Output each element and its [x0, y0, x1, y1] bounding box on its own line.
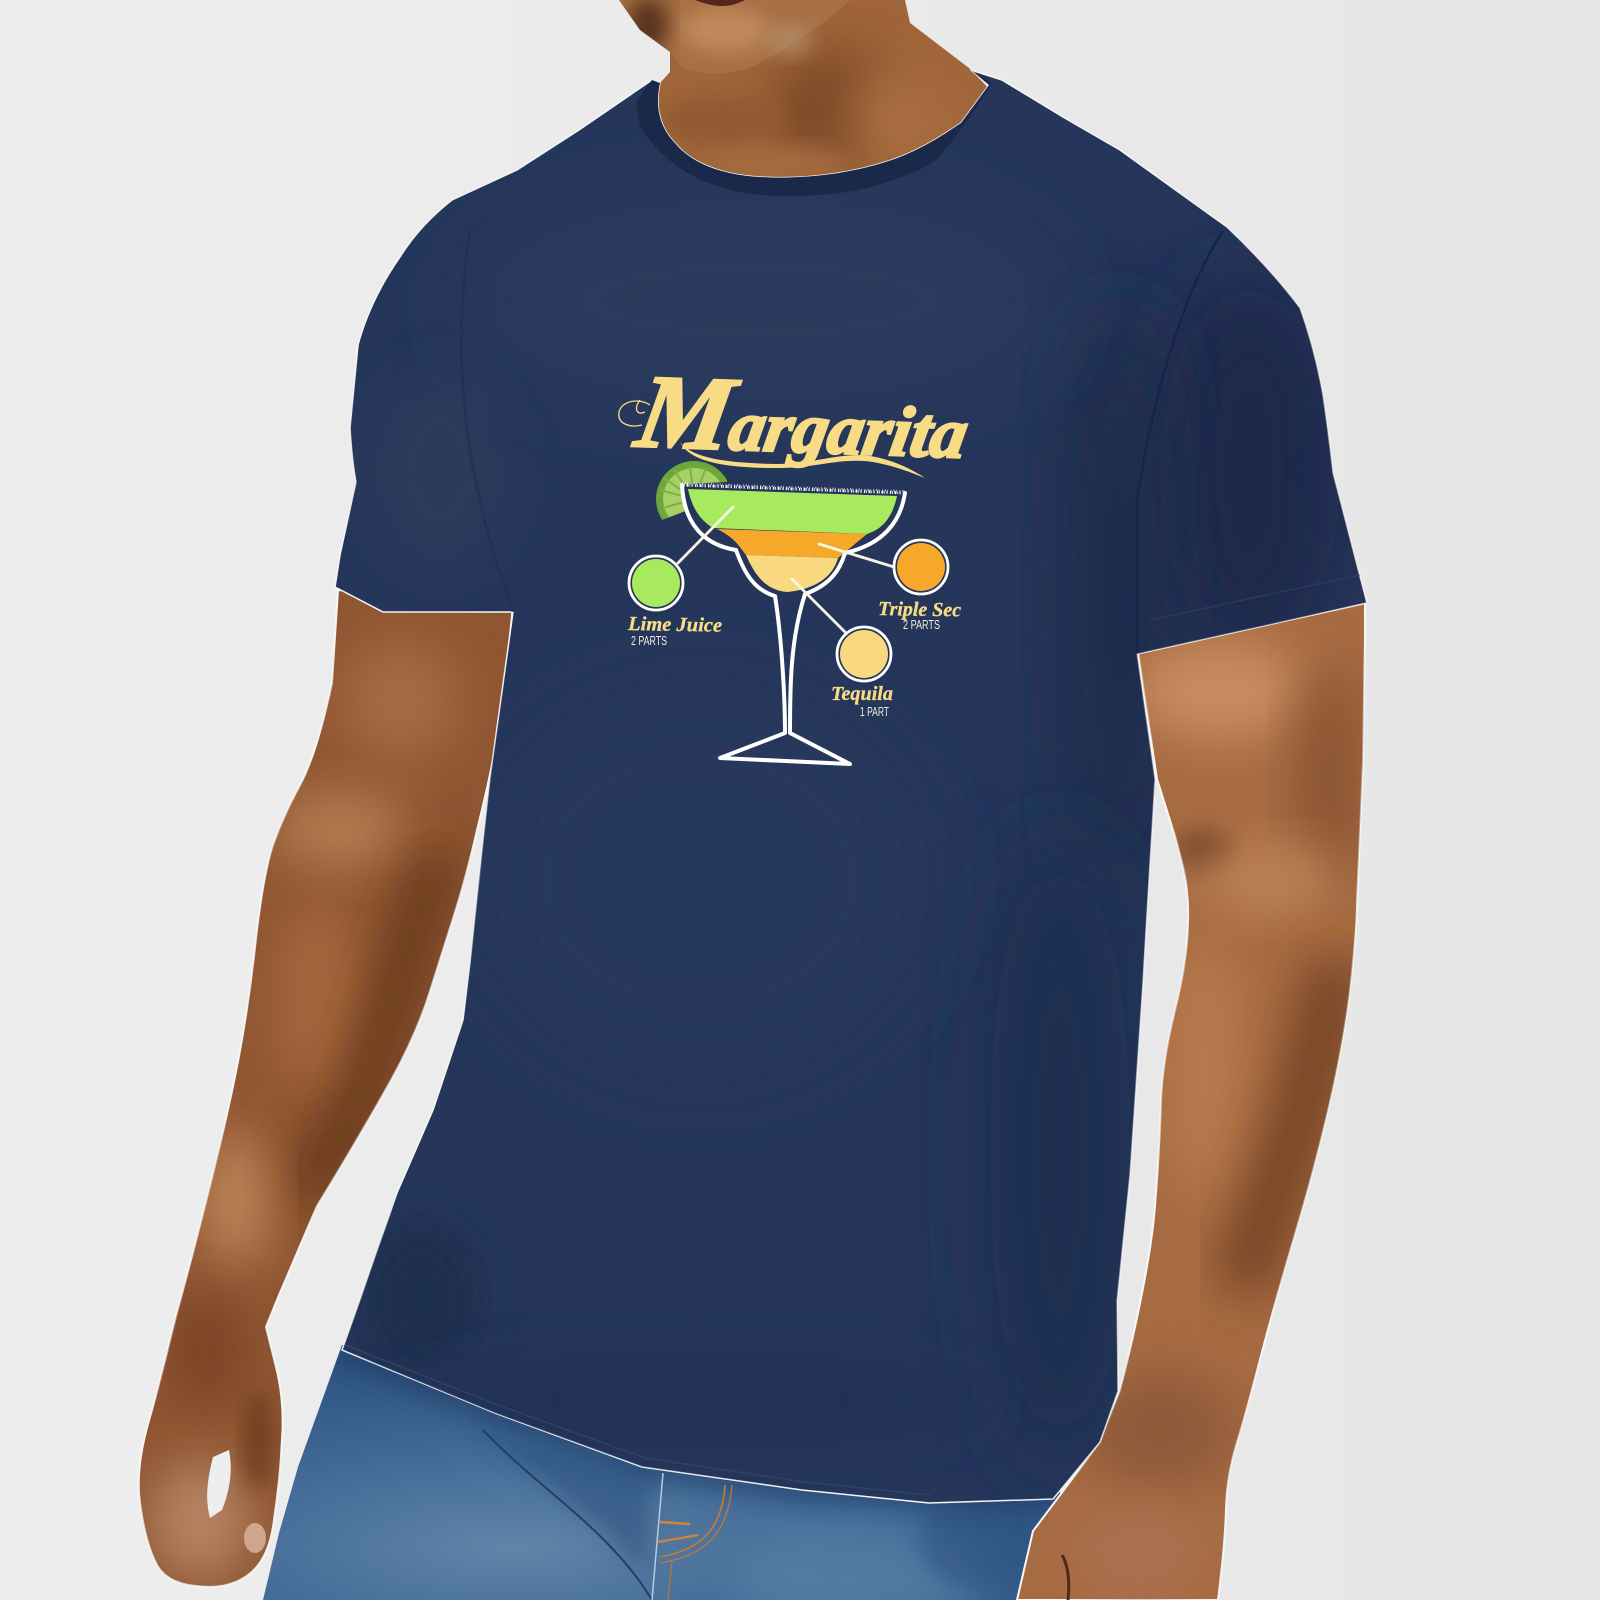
triple sec ingredient: 2 PARTS: [903, 618, 940, 632]
fingernail: [244, 1523, 266, 1553]
lime juice ingredient: Lime Juice: [627, 613, 722, 637]
lime juice ingredient: 2 PARTS: [631, 634, 667, 648]
chin: [619, 0, 850, 74]
title swash loop: [619, 400, 650, 426]
tequila ingredient: Tequila: [831, 683, 893, 705]
callout lines: [678, 507, 894, 632]
glass outline: [682, 485, 905, 764]
lime juice layer: [688, 489, 897, 534]
collar: [637, 70, 992, 196]
title flourish: [680, 442, 925, 478]
navy t-shirt: [335, 70, 1367, 1503]
jeans pocket seam and fly: [483, 1430, 732, 1600]
lime juice ingredient: [627, 556, 722, 648]
salt rim: [682, 483, 905, 493]
cocktail graphic: [619, 353, 979, 764]
triple sec ingredient: Triple Sec: [878, 598, 961, 621]
tequila layer: [746, 555, 838, 592]
neck and chin: [619, 0, 987, 177]
tequila ingredient: 1 PART: [860, 705, 889, 719]
right arm and hand: [1017, 600, 1365, 1600]
title: Margarita: [627, 353, 979, 480]
lower lip shadow: [695, 0, 745, 6]
triple sec layer: [717, 529, 867, 558]
lime wedge garnish: [656, 461, 728, 520]
tequila ingredient: [831, 627, 893, 719]
gap between thumb and fingers: [207, 1450, 231, 1518]
liquid layers: [688, 489, 897, 592]
left arm and hand: [139, 590, 513, 1587]
triple sec ingredient: [878, 540, 961, 632]
jeans: [250, 1340, 1070, 1600]
